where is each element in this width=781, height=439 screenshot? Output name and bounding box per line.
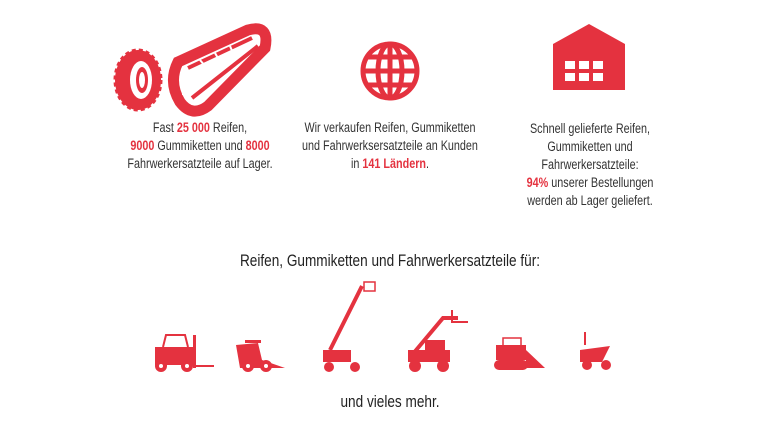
icon: dumper xyxy=(580,332,611,370)
text: delivery: Fahrwerkersatzteile: xyxy=(541,157,639,172)
icon: boom lift xyxy=(323,282,375,372)
text: delivery: 94% unserer Bestellungen xyxy=(527,175,653,190)
icon: tire xyxy=(115,50,161,110)
text: stock xyxy=(127,120,273,171)
text: countries: in 141 Ländern. xyxy=(351,156,429,171)
icon: telehandler xyxy=(408,310,468,372)
text: delivery: Schnell gelieferte Reifen, xyxy=(530,121,650,136)
text: countries xyxy=(302,120,478,171)
text: countries: und Fahrwerksersatzteile an Kunden xyxy=(302,138,478,153)
icon: globe xyxy=(363,44,417,98)
icon: skid steer xyxy=(236,340,285,372)
text: countries: Wir verkaufen Reifen, Gummiketten xyxy=(304,120,476,135)
text: stock: Fast 25 000 Reifen, xyxy=(153,120,247,135)
text: footer: und vieles mehr. xyxy=(340,392,440,411)
icon: warehouse xyxy=(553,24,625,90)
heading: machines: Reifen, Gummiketten und Fahrwerkersatzteile für: xyxy=(240,251,540,270)
text: delivery xyxy=(527,121,653,208)
icon: tracked loader xyxy=(494,338,545,370)
icon: rubber track xyxy=(173,29,266,111)
icon: forklift xyxy=(155,335,214,372)
text: delivery: werden ab Lager geliefert. xyxy=(527,193,653,208)
text: stock: Fahrwerkersatzteile auf Lager. xyxy=(127,156,273,171)
text: stock: 9000 Gummiketten und 8000 xyxy=(130,138,270,153)
text: delivery: Gummiketten und xyxy=(547,139,633,154)
